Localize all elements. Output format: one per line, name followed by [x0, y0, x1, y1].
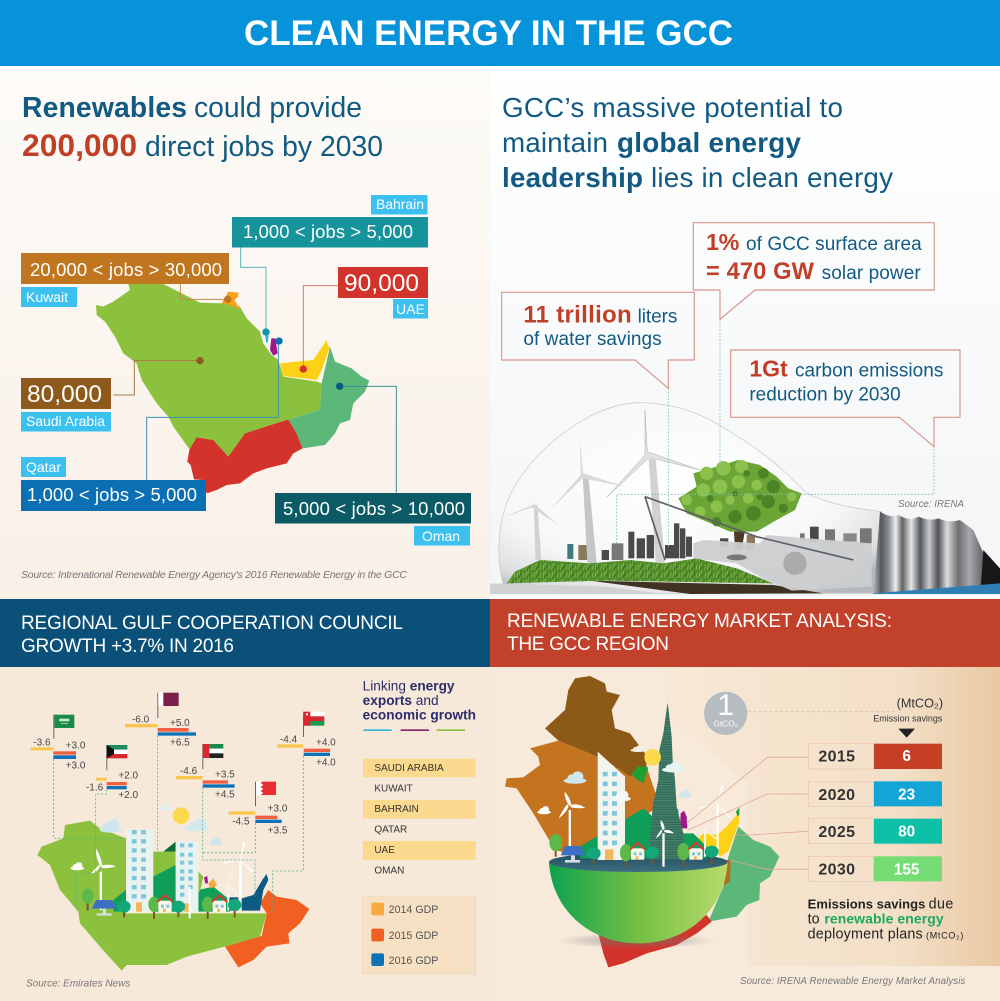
table header: Emission savings: [873, 714, 943, 724]
country GDP: Kuwait: [86, 745, 138, 801]
legend: [363, 897, 476, 974]
map: Qatar: [270, 338, 278, 356]
ground: [490, 583, 663, 594]
callout: carbon emissions: 1Gt: [749, 356, 788, 382]
houses: [629, 842, 704, 860]
row: 2020: 23: [898, 786, 915, 803]
legend: 2015 GDP: [389, 930, 438, 942]
row: 2025: 2025: [818, 824, 855, 841]
map: UAE: [280, 340, 330, 380]
country list: QATAR: [374, 825, 407, 836]
map: Yemen: [598, 915, 712, 967]
country GDP: Bahrain: [229, 782, 288, 836]
country GDP: Bahrain: +3.0: [268, 803, 288, 814]
panel: market analysis: [490, 667, 1000, 1001]
map: Qatar: [680, 811, 687, 828]
callout: solar power: solar power: [822, 263, 921, 284]
solar panel: [92, 900, 117, 916]
solar panel: [561, 846, 585, 863]
map: Oman: [288, 347, 369, 448]
tall apartment building: [598, 752, 625, 860]
panel: renewable jobs map: [0, 69, 490, 599]
clouds: [71, 804, 223, 870]
caption: to: [808, 911, 820, 927]
heading: jobs: [22, 91, 383, 163]
callout: solar power: [693, 223, 934, 319]
country GDP: Oman: +4.0: [316, 737, 336, 748]
row: 2030: 2030: [818, 861, 855, 878]
callout: solar power: = 470 GW: [706, 259, 815, 285]
heading: leadership: lies in clean energy: [651, 162, 893, 193]
soil: [590, 581, 823, 594]
country GDP: Oman: [277, 712, 336, 768]
callout: Saudi Arabia: Saudi Arabia: [26, 413, 105, 429]
callout: Saudi Arabia: [21, 378, 111, 432]
source: Source: Emirates News: [26, 979, 130, 990]
wind turbines: [503, 410, 700, 563]
country GDP: Bahrain: -4.5: [232, 816, 250, 827]
callout: UAE: [338, 267, 428, 318]
dashed leader: [748, 710, 895, 713]
callout: Saudi Arabia: 80,000: [27, 381, 102, 408]
country GDP: Bahrain: +3.5: [268, 825, 288, 836]
callout: UAE: UAE: [396, 301, 425, 317]
caption: due: [929, 896, 953, 912]
tree: [678, 460, 802, 550]
callout: Oman: Oman: [422, 528, 460, 544]
heading: linking energy: Linking energy: [363, 679, 455, 694]
callout: Oman: [275, 493, 471, 546]
callout: water savings: 11 trillion: [523, 301, 632, 328]
filament support: [645, 497, 872, 591]
panel: GDP growth: [0, 667, 490, 1001]
trees: [82, 888, 241, 919]
connector: Saudi Arabia: [113, 361, 200, 395]
mountains: [580, 808, 657, 858]
callout: Qatar: [21, 457, 206, 511]
callout: UAE: 90,000: [344, 270, 419, 297]
map: Bahrain: [675, 808, 679, 815]
row: 2015: [808, 744, 942, 769]
country GDP: Oman: +4.0: [316, 757, 336, 768]
row: 2030: 155: [894, 862, 920, 879]
section band: market analysis: RENEWABLE ENERGY MARKET ANALYSIS:: [507, 611, 892, 632]
heading: linking energy: economic growth: [363, 707, 476, 722]
callout: carbon emissions: reduction by 2030: [749, 385, 901, 406]
buildings: [127, 829, 198, 912]
map: Kuwait: [222, 292, 240, 309]
map: UAE: [697, 813, 739, 857]
wind turbines: [559, 785, 731, 867]
country GDP: Saudi Arabia: +3.0: [66, 741, 86, 752]
row: 2025: 80: [898, 823, 915, 840]
country list: BAHRAIN: [374, 804, 419, 815]
callout: water savings: of water savings: [523, 329, 662, 350]
country list: [363, 759, 476, 877]
callout: water savings: [502, 292, 694, 388]
map: Yemen: [187, 419, 303, 493]
base tip: [981, 550, 1000, 588]
country GDP: Saudi Arabia: +3.0: [66, 761, 86, 772]
connector: Kuwait: [180, 284, 228, 299]
connector: Oman: [340, 386, 396, 493]
caption: Emissions savings: [808, 896, 925, 911]
source: Source: IRENA Renewable Energy Market Analysis: [740, 976, 966, 987]
country GDP: Saudi Arabia: [31, 715, 86, 772]
heading: jobs: could provide: [194, 91, 362, 123]
heading: jobs: direct jobs by 2030: [145, 130, 383, 162]
country GDP: Kuwait: -1.6: [86, 783, 104, 794]
bowl: [549, 852, 731, 943]
section band: regional growth: REGIONAL GULF COOPERATION COUNCIL: [21, 613, 403, 634]
map of GCC countries with job figures: [96, 247, 396, 493]
map markers: [196, 296, 343, 390]
heading: leadership: leadership: [502, 162, 643, 193]
clouds: [537, 745, 692, 814]
map with city bowl: [505, 676, 779, 967]
legend: 2016 GDP: [389, 955, 438, 967]
heading: leadership: global energy: [617, 127, 802, 158]
callout: Bahrain: [232, 195, 428, 248]
map: Iraq: [545, 676, 647, 777]
source: Source: Intrenational Renewable Energy Agency's 2016 Renewable Energy in the GCC: [21, 569, 407, 581]
callout: carbon emissions: [731, 350, 960, 447]
grass: [507, 558, 773, 583]
country GDP: UAE: -4.6: [180, 766, 198, 777]
sun: [644, 749, 661, 766]
badge: 1 GtCO2: 1: [717, 689, 734, 722]
table header: (MtCO₂): [897, 696, 943, 710]
callout: solar power: 1%: [706, 229, 740, 255]
map: Saudi Arabia: [96, 284, 322, 457]
caption: (MtCO₂): [926, 930, 963, 940]
row: 2025: [808, 819, 942, 844]
country GDP: Kuwait: +2.0: [118, 771, 138, 782]
legend: 2014 GDP: [389, 904, 438, 916]
country GDP: Qatar: +5.0: [170, 718, 190, 729]
callout: Kuwait: Kuwait: [26, 289, 68, 305]
map: Kuwait: [632, 766, 648, 783]
shadow: [557, 933, 717, 949]
caption: deployment plans: [808, 926, 923, 942]
section band: market analysis: THE GCC REGION: [507, 634, 669, 655]
connector: Bahrain: [241, 247, 266, 332]
map: Bahrain: [265, 335, 269, 343]
heading: leadership: GCC’s massive potential to: [502, 92, 843, 123]
country list: OMAN: [374, 866, 404, 877]
bulb glass: [499, 403, 882, 593]
callout: water savings: liters: [638, 306, 677, 327]
source: Source: IRENA: [898, 499, 964, 510]
caption: [808, 896, 963, 942]
country GDP: Saudi Arabia: -3.6: [33, 737, 51, 748]
country GDP: Qatar: +6.5: [170, 738, 190, 749]
dotted guide lines: [617, 319, 934, 547]
map: Oman: [225, 890, 309, 967]
callout: carbon emissions: carbon emissions: [795, 361, 943, 382]
sun: [173, 807, 189, 824]
callout: Qatar: 1,000 < jobs > 5,000: [27, 484, 197, 505]
callout: Bahrain: 1,000 < jobs > 5,000: [243, 221, 413, 242]
map: Saudi Arabia: [505, 741, 657, 857]
wind turbines: [91, 842, 254, 918]
callout: Kuwait: 20,000 < jobs > 30,000: [30, 259, 222, 280]
trees: [549, 834, 719, 867]
row: 2015: 2015: [818, 748, 855, 765]
heading: linking energy: exports and: [363, 693, 439, 708]
Burj Khalifa tower: [649, 703, 684, 859]
connector lines: [687, 757, 808, 869]
map: UAE: [242, 874, 268, 911]
light bulb photo illustration: [490, 223, 1000, 594]
heading: leadership: [502, 92, 893, 193]
illustrated map of the GCC: [37, 736, 309, 971]
skyline buildings: [567, 523, 872, 560]
map: Oman: [708, 827, 779, 922]
row: 2020: 2020: [818, 787, 855, 804]
heading: leadership: maintain: [502, 127, 608, 158]
background wedge: [667, 667, 1000, 966]
section band: regional growth: GROWTH +3.7% IN 2016: [21, 636, 234, 657]
badge: 1 GtCO2: GtCO₂: [713, 719, 738, 729]
dashed connectors: [54, 736, 303, 912]
country GDP: UAE: +3.5: [215, 770, 235, 781]
table header: [873, 696, 943, 738]
mountains: [113, 842, 238, 912]
map land: [37, 821, 267, 971]
country list: SAUDI ARABIA: [374, 763, 444, 774]
country GDP: Qatar: [125, 693, 196, 749]
heading: linking energy: [363, 679, 476, 731]
callout: Bahrain: Bahrain: [376, 196, 424, 212]
country GDP: Oman: -4.4: [280, 734, 298, 745]
country GDP: Qatar: -6.0: [132, 715, 150, 726]
caption: renewable energy: [824, 910, 944, 926]
title: CLEAN ENERGY IN THE GCC: [244, 14, 733, 53]
section band: market analysis: [490, 599, 1000, 667]
callout: Qatar: Qatar: [26, 459, 61, 475]
country list: UAE: [374, 845, 395, 856]
row: 2015: 6: [902, 748, 911, 765]
connector: Qatar: [147, 342, 278, 480]
callout: Kuwait: [21, 253, 229, 307]
country GDP: Kuwait: +2.0: [118, 790, 138, 801]
row: 2030: [808, 856, 942, 881]
section band: regional growth: [0, 599, 490, 667]
country GDP: UAE: [176, 744, 235, 800]
callout: solar power: of GCC surface area: [746, 234, 922, 255]
callout: Oman: 5,000 < jobs > 10,000: [283, 498, 465, 519]
header band: [0, 0, 1000, 66]
row: 2020: [808, 781, 942, 806]
country GDP: UAE: +4.5: [215, 789, 235, 800]
badge: 1 GtCO2: [704, 689, 747, 735]
country list: KUWAIT: [374, 783, 413, 794]
heading: jobs: 200,000: [22, 127, 137, 163]
connector: UAE: [303, 286, 338, 369]
bulb screw base: [873, 512, 985, 594]
heading: jobs: Renewables: [22, 91, 187, 123]
water strip: [873, 583, 1000, 594]
houses: [157, 894, 228, 912]
panel: global energy leadership: [490, 66, 1000, 596]
